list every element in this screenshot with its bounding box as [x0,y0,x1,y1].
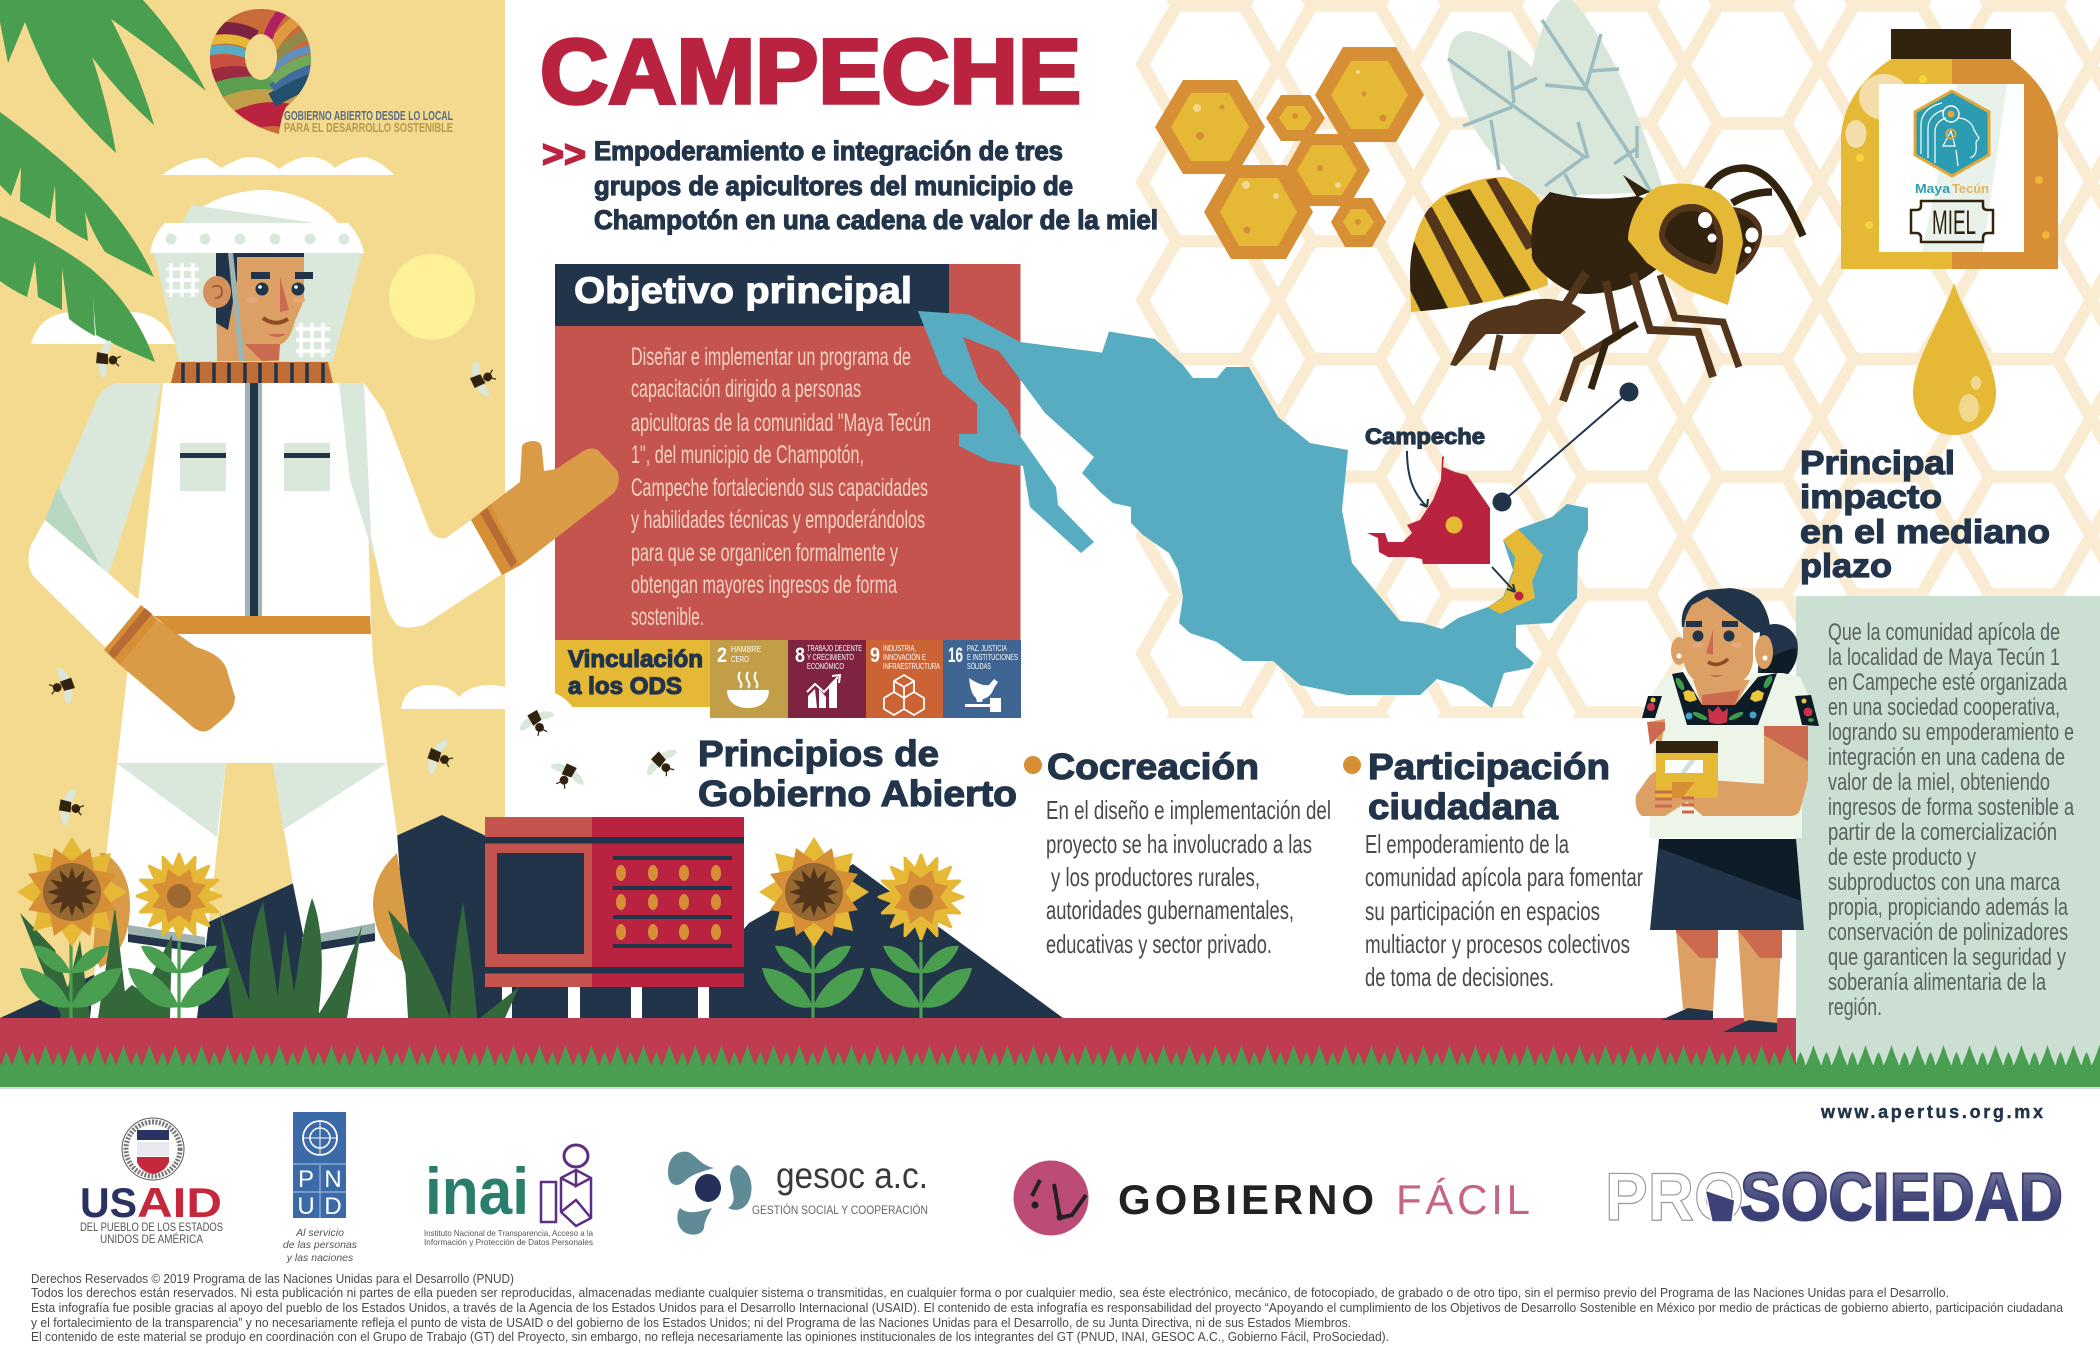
zipper [245,383,262,616]
USAID tagline: DEL PUEBLO DE LOS ESTADOS [80,1222,223,1234]
text: participación: de toma de decisiones. [1365,962,1554,992]
bullet: cocreación [1024,756,1042,774]
PNUD tagline: de las personas [283,1239,358,1251]
objetivo text: obtengan mayores ingresos de forma [631,571,897,599]
mountains [0,815,1063,1018]
sunflower 3 [759,837,869,1018]
woman hair [1682,588,1770,633]
logo: ProSociedad: PRO [1605,1159,1744,1235]
straps [128,923,375,945]
woman face details [1686,621,1742,677]
sleeve embroidery right [1795,695,1819,726]
woman blouse [1649,673,1812,838]
jacket mint shoulders [45,383,375,574]
ODS tile 8: 8 [795,644,805,667]
bee antennae [1703,168,1803,236]
map: Champotón dot [1514,592,1524,600]
ODS tile 8 [788,640,866,718]
subtitle: Champotón en una cadena de valor de la miel [594,205,1158,235]
logo text: GOBIERNO ABIERTO DESDE LO LOCAL [284,109,453,123]
logo: Gobierno Fácil: FÁCIL [1396,1176,1530,1223]
logo: PNUD: P [298,1166,314,1193]
ODS tile 2: CERO [731,654,749,664]
logo: PNUD [283,1112,358,1264]
ODS heading [568,646,703,700]
text: MIEL box [1911,201,1993,242]
PNUD tagline: y las naciones [286,1252,354,1264]
woman hair bun [1757,624,1798,690]
text: participación [1365,829,1643,992]
objetivo text: para que se organicen formalmente y [631,539,898,567]
objetivo text: 1", del municipio de Champotón, [631,441,864,469]
illustration: beehive [485,817,744,1018]
impacto text [1828,619,2074,1021]
icon: honey drop [1913,283,1996,435]
sleeve embroidery left [1642,696,1662,718]
ODS tile 16: E INSTITUCIONES [967,652,1018,662]
PNUD tagline: Al servicio [295,1227,344,1239]
bee eye [1659,204,1723,274]
woman head [1683,597,1753,687]
right arm [364,383,502,628]
jar held [1656,741,1718,798]
illustration: honey jar [1841,29,2058,269]
ODS tile 8: TRABAJO DECENTE [807,643,862,653]
sun [389,254,475,340]
heading: principal impacto: Principal [1800,444,1955,481]
right glove [471,441,619,575]
logo: GESOC: gesoc a.c. [776,1155,928,1196]
text: cocreación: autoridades gubernamentales, [1046,895,1294,925]
url: www.apertus.org.mx [1820,1102,2043,1122]
text: Maya Tecún [1915,182,1989,196]
INAI caption: Información y Protección de Datos Personales [424,1237,593,1247]
ODS tile 9: 9 [870,644,880,667]
jar label [1879,84,2024,252]
legal text: y el fortalecimiento de la transparencia” y no necesariamente refleja el punto de vista de USAID o del gobierno de los Estados Unidos; ni del Programa de las Naciones Unidas para el Desarrollo, de su Junta Directiva, ni de sus Estados Miembros. [31,1316,1351,1330]
legal text: Todos los derechos están reservados. Ni esta publicación ni partes de ella pueden ser reproducidas, almacenadas mediante cualquier sistema o transmitidas, en cualquier forma o por cualquier medio, sea éste electrónico, mecánico, de fotocopiado, de grabado o de otro tipo, sin el permiso previo del Programa de las Naciones Unidas para el Desarrollo. [31,1286,1949,1300]
objetivo text: capacitación dirigido a personas [631,375,861,403]
text: participación: multiactor y procesos colectivos [1365,929,1630,959]
ground: green grass spikes [0,1045,2100,1089]
woman left arm [1636,719,1690,816]
logo: INAI [424,1145,593,1247]
collar [171,362,333,383]
woman neck [1693,680,1750,706]
belt [154,616,371,634]
ODS tile 16: PAZ, JUSTICIA [967,643,1007,653]
logo: ProSociedad [1605,1159,2063,1235]
panel: principal impacto [1796,596,2100,1066]
logo: INAI: inai [425,1154,529,1228]
ODS tile 2: 2 [717,644,727,667]
logo: Maya Tecún hexagon [1915,91,1989,176]
logo: USAID [80,1118,223,1246]
logo: Gobierno abierto desde lo local [205,5,453,137]
title: CAMPECHE [540,21,1081,123]
panel: objetivo principal [555,264,1020,640]
ODS tile 9: INFRAESTRUCTURA [883,661,940,671]
logo: PNUD: D [324,1193,342,1220]
ODS tile 9 [866,640,943,718]
USAID wordmark [80,1179,222,1226]
panel: yellow background [0,0,505,1018]
woman ears [1671,637,1687,665]
veil mesh right [296,323,330,357]
impacto text: región. [1828,994,1882,1021]
INAI caption [424,1228,593,1247]
embroidered collar [1672,672,1777,725]
objetivo text: Campeche fortaleciendo sus capacidades [631,474,928,502]
legal text [31,1272,2063,1344]
text: participación: El empoderamiento de la [1365,829,1569,859]
bee head [1628,184,1743,305]
text: MIEL box: MIEL [1932,204,1976,242]
heading: participación ciudadana: Participación [1368,746,1610,787]
text: Maya Tecún: Maya [1915,182,1951,196]
connector line [1492,382,1638,512]
illustration: small bees [45,338,685,829]
trousers [90,598,410,1018]
logo: Gobierno abierto desde lo local: PARA EL DESARROLLO SOSTENIBLE [284,121,453,135]
cloud left [31,312,175,344]
USAID wordmark: US [80,1179,137,1226]
decorative honeycomb cells [1155,47,1424,259]
logo: GESOC [668,1152,928,1235]
map: enlarged Campeche state [1367,456,1490,564]
cloud top [162,157,394,175]
subtitle arrows: >> [542,134,586,176]
sunflower 1 [17,837,127,1018]
text: cocreación: educativas y sector privado. [1046,929,1272,959]
heading: principal impacto [1800,444,2050,584]
objetivo text: Diseñar e implementar un programa de [631,343,911,371]
illustration: woman beekeeper [1636,588,1819,1032]
heading: participación ciudadana [1368,746,1610,827]
text: participación: comunidad apícola para fomentar [1365,862,1643,892]
heading: participación ciudadana: ciudadana [1368,786,1559,827]
objetivo text: apicultoras de la comunidad "Maya Tecún [631,409,931,437]
objetivo text: y habilidades técnicas y empoderándolos [631,506,925,534]
objetivo text: sostenible. [631,603,704,631]
woman fingers [1655,792,1694,812]
logo: PNUD: N [324,1166,342,1193]
text: cocreación: proyecto se ha involucrado a las [1046,829,1312,859]
bee thorax [1531,192,1688,294]
logo: Gobierno Fácil [1014,1160,1530,1236]
legal text: El contenido de este material se produjo en coordinación con el Grupo de Trabajo (GT) del Proyecto, sin embargo, no refleja necesariamente las opiniones institucionales de los integrantes del GT (PNUD, INAI, GESOC A.C., Gobierno Fácil, ProSociedad). [31,1330,1389,1344]
PNUD tagline [283,1227,358,1264]
ODS tile 16: SÓLIDAS [967,661,991,671]
veil mesh left [166,263,199,297]
illustration: grass blades [20,898,519,1018]
map: Mexico [918,311,1588,708]
USAID wordmark: AID [137,1179,222,1226]
heading: principios de gobierno abierto: Gobierno Abierto [698,773,1017,814]
arrow: label to state [1407,451,1428,507]
bee wings [1448,0,1664,196]
logo: Gobierno Fácil: GOBIERNO [1118,1176,1374,1223]
panel: vinculación a los ODS [555,640,1021,718]
trouser creases [116,763,387,837]
subtitle: grupos de apicultores del municipio de [594,171,1073,201]
woman right arm [1680,726,1808,816]
heading: principal impacto: plazo [1800,547,1892,584]
ODS tile 8: ECONÓMICO [807,661,844,671]
text: Maya Tecún: Tecún [1952,182,1989,196]
legal text: Derechos Reservados © 2019 Programa de las Naciones Unidas para el Desarrollo (PNUD) [31,1272,514,1286]
bullet: participación [1343,756,1361,774]
label: Campeche: Campeche [1365,424,1485,449]
text: participación: su participación en espacios [1365,896,1600,926]
heading: principal impacto: en el mediano [1800,513,2050,550]
ground: red band [0,1018,1796,1066]
face [203,253,313,361]
ODS heading: a los ODS [568,673,682,700]
illustration: large bee [1405,0,1803,401]
left glove [104,605,235,732]
heading: principios de gobierno abierto [698,733,1017,814]
ODS tile 16: 16 [948,644,963,667]
ODS tile 9: INDUSTRIA, [883,643,916,653]
bee legs [1450,273,1739,401]
pockets [180,443,330,491]
illustration: beekeeper [28,190,619,1018]
impacto text: de este producto y [1828,844,1977,871]
logo: ProSociedad: SOCIEDAD [1740,1159,2063,1235]
hat brim [150,223,364,253]
palm leaves [0,0,206,362]
heading: cocreación: Cocreación [1047,746,1259,787]
jacket torso [136,383,371,620]
sunflower 4 [870,855,972,1018]
ODS tile 9: INNOVACIÓN E [883,652,926,662]
ODS tile 8: Y CRECIMIENTO [807,652,854,662]
bee rear eye [1732,207,1762,275]
heading: principal impacto: impacto [1800,478,1942,515]
text: cocreación: En el diseño e implementación del [1046,795,1331,825]
legal text: Esta infografía fue posible gracias al apoyo del pueblo de los Estados Unidos, a través de la Agencia de los Estados Unidos para el Desarrollo Internacional (USAID). El contenido de esta infografía es responsabilidad del proyecto “Apoyando el cumplimiento de los Objetivos de Desarrollo Sostenible en México por medio de prácticas de gobierno abierto, participación ciudadana [31,1301,2063,1315]
text: cocreación: y los productores rurales, [1051,862,1260,892]
ODS tile 2: HAMBRE [731,644,761,654]
bee abdomen [1405,177,1548,314]
map: arrow to Champotón [1492,567,1515,592]
heading: principios de gobierno abierto: Principios de [698,733,939,774]
INAI caption: Instituto Nacional de Transparencia, Acceso a la [424,1228,593,1238]
map: Campeche state highlight [1488,529,1543,614]
boots [93,853,414,968]
honeycomb background pattern [1142,0,2100,718]
subtitle [594,136,1158,235]
ODS heading: Vinculación [568,646,703,673]
ODS tile 2 [710,640,788,718]
cloud lower right of yellow panel [401,685,574,709]
hat dome [180,190,340,226]
left arm [28,520,154,647]
ODS tile 16 [943,640,1021,718]
veil [154,253,362,361]
bee spike [1623,175,1650,197]
objetivo text [631,343,931,631]
text: cocreación [1046,795,1331,959]
woman legs [1661,930,1782,1032]
logo: PNUD: U [297,1193,315,1220]
USAID tagline: UNIDOS DE AMÉRICA [100,1233,203,1246]
USAID tagline [80,1222,223,1246]
woman skirt [1650,839,1804,930]
subtitle: Empoderamiento e integración de tres [594,136,1063,166]
logo: GESOC: GESTIÓN SOCIAL Y COOPERACIÓN [752,1204,928,1217]
sunflower 2 [128,854,230,1018]
heading: objetivo principal: Objetivo principal [574,270,912,311]
